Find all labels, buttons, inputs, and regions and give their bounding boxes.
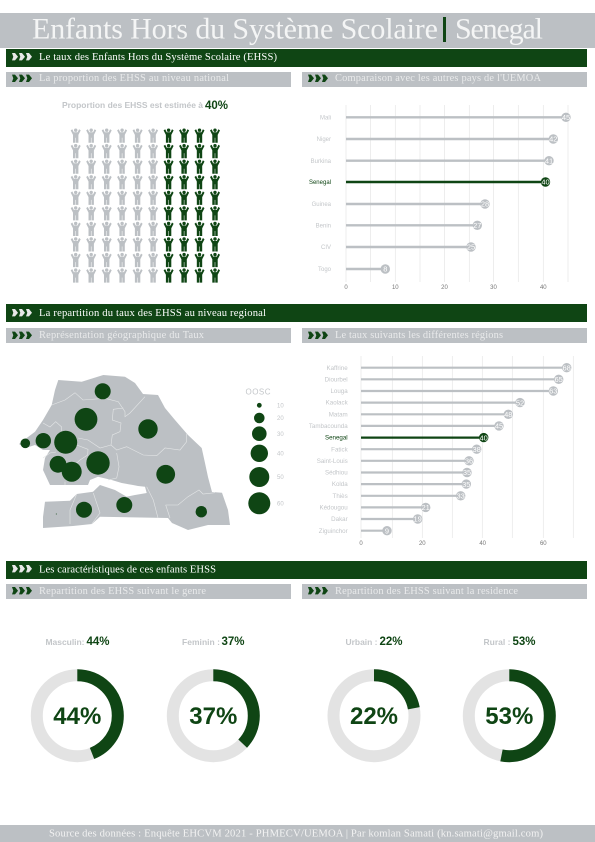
lollipop chart: regions: Ziguinchor: [319, 528, 348, 535]
lollipop chart: regions: Matam: [329, 411, 348, 418]
lollipop chart: UEMOA countries: 40: [540, 285, 547, 291]
panel heading: representation geographique: Représentation géographique du Taux: [39, 330, 205, 341]
donut: masculin: [37, 636, 118, 756]
lollipop chart: regions: 40: [480, 433, 488, 442]
lollipop chart: regions: Kédougou: [319, 504, 348, 512]
lollipop chart: regions: Saint-Louis: [317, 458, 348, 465]
map legend: OOSC: 40: [277, 452, 284, 458]
map legend: OOSC: OOSC: [246, 388, 271, 396]
lollipop chart: regions: 9: [385, 526, 389, 535]
lollipop chart: regions: 48: [504, 410, 512, 419]
panel heading: residence: [302, 584, 587, 599]
lollipop chart: regions: 36: [465, 456, 473, 466]
lollipop chart: regions: Louga: [330, 388, 348, 395]
title: Enfants Hors du Système Scolaire: [32, 12, 438, 46]
lollipop chart: regions: 63: [549, 387, 557, 396]
donut: feminin: 37%: [222, 636, 244, 648]
section heading: taux EHSS: [6, 49, 587, 67]
lollipop chart: regions: 45: [495, 422, 503, 431]
lollipop chart: UEMOA countries: CIV: [321, 245, 331, 251]
lollipop chart: regions: [309, 356, 573, 547]
lollipop chart: regions: Dakar: [331, 516, 348, 523]
lollipop chart: regions: Diourbel: [325, 376, 348, 383]
donut: rural: 53%: [485, 703, 533, 730]
panel heading: residence: Repartition des EHSS suivant la residence: [335, 586, 518, 597]
lollipop chart: regions: 68: [563, 363, 571, 372]
lollipop chart: UEMOA countries: Benin: [316, 223, 331, 229]
donut: masculin: Masculin:: [46, 637, 85, 647]
lollipop chart: UEMOA countries: 10: [392, 285, 399, 291]
lollipop chart: UEMOA countries: 8: [383, 265, 387, 274]
lollipop chart: regions: 38: [473, 445, 481, 454]
lollipop chart: UEMOA countries: Togo: [318, 267, 332, 273]
lollipop chart: regions: 20: [419, 541, 426, 547]
donut: feminin: Feminin :: [182, 637, 220, 647]
map legend: OOSC: [246, 388, 284, 514]
section heading: repartition regionale: [6, 304, 587, 322]
lollipop chart: UEMOA countries: 42: [549, 135, 557, 144]
lollipop chart: UEMOA countries: Guinea: [312, 202, 332, 208]
lollipop chart: UEMOA countries: 40: [541, 178, 550, 187]
lollipop chart: regions: Tambacounda: [309, 423, 348, 430]
lollipop chart: UEMOA countries: Mali: [320, 115, 331, 121]
lollipop chart: regions: Fatick: [331, 446, 349, 453]
panel heading: proportion nationale: [6, 72, 291, 87]
donut: masculin: 44%: [53, 703, 101, 730]
map legend: OOSC: 50: [277, 475, 284, 481]
lollipop chart: UEMOA countries: 27: [473, 221, 481, 230]
map legend: OOSC: 10: [277, 404, 284, 410]
lollipop chart: regions: 35: [462, 480, 470, 489]
map: Senegal regions with proportional bubbles: [19, 375, 230, 530]
lollipop chart: regions: 52: [516, 398, 524, 407]
donut: feminin: [173, 636, 254, 756]
panel heading: taux par region: [302, 328, 587, 343]
panel heading: comparaison UEMOA: [302, 72, 587, 87]
lollipop chart: regions: Kolda: [332, 481, 348, 488]
donut: masculin: 44%: [86, 636, 110, 648]
section heading: caracteristiques: [6, 561, 587, 579]
panel heading: genre: Repartition des EHSS suivant le genre: [39, 586, 206, 597]
lollipop chart: regions: Thiès: [333, 493, 348, 500]
lollipop chart: regions: 0: [359, 541, 363, 547]
lollipop chart: regions: 60: [540, 541, 547, 547]
donut: urbain: 22%: [380, 636, 402, 648]
title: Senegal: [455, 12, 543, 46]
lollipop chart: regions: 35: [463, 468, 471, 477]
lollipop chart: UEMOA countries: 41: [545, 156, 553, 165]
panel heading: proportion nationale: La proportion des EHSS au niveau national: [39, 73, 229, 84]
pictogram: 100 children, 40 highlighted: [71, 128, 220, 283]
panel heading: genre: [6, 584, 291, 599]
lollipop chart: regions: Senegal: [325, 435, 348, 442]
lollipop chart: regions: 33: [457, 492, 465, 500]
donut: rural: 53%: [512, 636, 536, 648]
lollipop chart: UEMOA countries: 28: [481, 200, 489, 209]
lollipop chart: regions: 65: [555, 375, 563, 384]
proportion statement: 40%: [205, 100, 228, 112]
lollipop chart: UEMOA countries: 0: [344, 285, 348, 291]
map legend: OOSC: 30: [277, 432, 284, 438]
lollipop chart: regions: 19: [414, 515, 422, 524]
lollipop chart: UEMOA countries: Niger: [317, 137, 331, 143]
donut: urbain: 22%: [350, 703, 398, 730]
lollipop chart: regions: 40: [479, 541, 487, 547]
section heading: taux EHSS: Le taux des Enfants Hors du Système Scolaire (EHSS): [39, 52, 277, 63]
lollipop chart: UEMOA countries: 30: [490, 285, 497, 291]
donut: urbain: [334, 636, 414, 756]
lollipop chart: UEMOA countries: 45: [562, 113, 570, 122]
lollipop chart: UEMOA countries: Senegal: [309, 180, 331, 186]
lollipop chart: UEMOA countries: 25: [467, 243, 475, 252]
map legend: OOSC: 20: [277, 416, 284, 422]
panel heading: taux par region: Le taux suivants les différentes régions: [335, 330, 503, 341]
panel heading: representation geographique: [6, 328, 291, 343]
lollipop chart: UEMOA countries: 20: [441, 285, 448, 291]
donut: urbain: Urbain :: [346, 637, 378, 647]
section heading: repartition regionale: La repartition du taux des EHSS au niveau regional: [39, 308, 266, 319]
lollipop chart: UEMOA countries: Burkina: [311, 159, 332, 165]
lollipop chart: UEMOA countries: [309, 105, 571, 291]
donut: rural: Rural :: [484, 637, 511, 647]
footer: source: Source des données : Enquête EHCVM 2021 - PHMECV/UEMOA | Par komlan Samati (kn.samati@gmail.com): [49, 828, 543, 840]
proportion statement: Proportion des EHSS est estimée à: [62, 100, 203, 110]
donut: rural: [469, 636, 550, 756]
lollipop chart: regions: Sédhiou: [325, 470, 348, 477]
title: [0, 12, 595, 48]
map legend: OOSC: 60: [277, 502, 284, 508]
lollipop chart: regions: Kaffrine: [326, 365, 348, 372]
section heading: caracteristiques: Les caractéristiques de ces enfants EHSS: [39, 564, 216, 576]
lollipop chart: regions: Kaolack: [326, 400, 349, 407]
footer: source: [0, 825, 595, 842]
donut: feminin: 37%: [189, 703, 237, 730]
lollipop chart: regions: 21: [422, 503, 430, 512]
panel heading: comparaison UEMOA: Comparaison avec les autres pays de l'UEMOA: [335, 73, 541, 84]
